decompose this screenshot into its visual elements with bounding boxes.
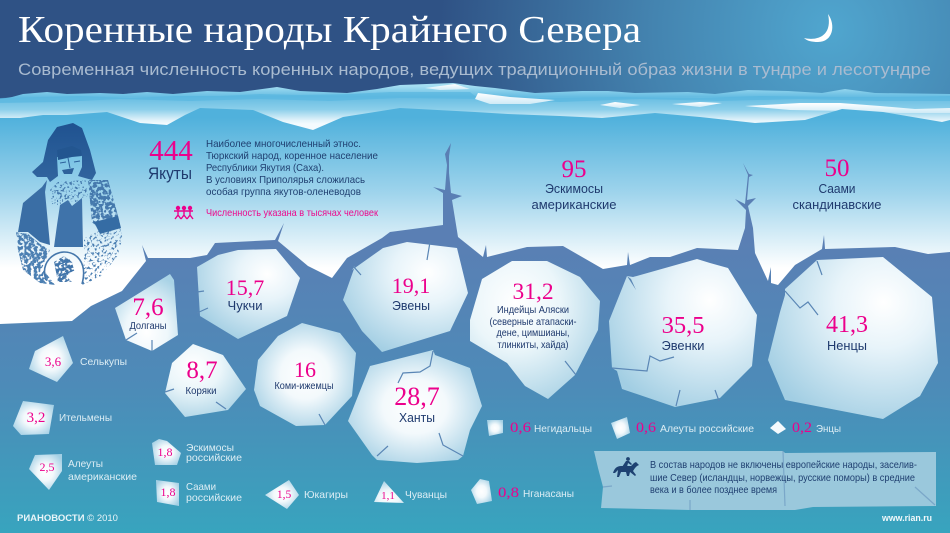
credit: RIA Novosti: РИАНОВОСТИ © 2010	[17, 513, 118, 524]
floe: Alaska Indians: дене, цимшианы,	[496, 327, 570, 339]
floe: Koryaks: Коряки	[186, 385, 217, 397]
ice horizon band	[0, 83, 950, 130]
floe: Evenks: 35,5	[662, 312, 704, 339]
Yakuts description: В условиях Приполярья сложилась	[206, 174, 365, 186]
floe: American Aleuts: 2,5	[40, 460, 54, 474]
floe: Chuvans	[374, 481, 447, 503]
floe: Enets	[770, 420, 841, 436]
floe: Evenks: Эвенки	[662, 338, 704, 353]
floe: Chukchi: 15,7	[226, 275, 264, 300]
floe: Alaska Indians: 31,2	[512, 279, 554, 305]
floe: Nenets: Ненцы	[827, 338, 867, 353]
Yakuts value and name: 444	[149, 135, 193, 167]
floe: Selkups	[29, 336, 127, 382]
floe: Russian Eskimos: Эскимосы	[186, 442, 234, 454]
floe: Komi-Izhemtsy: 16	[294, 357, 316, 382]
Scandinavian Saami: Саами	[818, 182, 856, 196]
sea ice with gradient	[0, 108, 950, 533]
illustration: Yakut man in a fur hood	[16, 123, 123, 285]
floe: Khanty: Ханты	[399, 410, 435, 425]
floe: Russian Eskimos: российские	[186, 452, 242, 464]
floe: Russian Saami: 1,8	[160, 485, 176, 499]
floe: Chuvans: 1,1	[381, 490, 395, 502]
floe: Itelmens: Ительмены	[59, 412, 112, 424]
floe: Itelmens: 3,2	[27, 410, 45, 426]
floe: Enets: 0,2	[792, 420, 812, 436]
floe: Chukchi: Чукчи	[228, 298, 262, 313]
floe: Evenks	[609, 259, 757, 407]
floe: Dolgans: Долганы	[130, 321, 166, 332]
floe: Nenets	[768, 257, 938, 419]
floe: Evens: Эвены	[392, 298, 430, 313]
floe: Negidals: 0,6	[510, 420, 532, 436]
floe: American Aleuts: американские	[68, 471, 137, 483]
floe: Alaska Indians: тлинкиты, хайда)	[498, 339, 568, 351]
floe: Russian Saami: российские	[186, 492, 242, 504]
American Eskimos: американские	[532, 198, 617, 212]
floe: Alaska Indians	[470, 261, 600, 399]
floe: Koryaks: 8,7	[186, 357, 218, 384]
floe: Nenets: 41,3	[826, 312, 868, 338]
floe: Chukchi	[197, 249, 300, 339]
American Eskimos: 95	[562, 156, 586, 183]
floe: Selkups: Селькупы	[80, 356, 127, 368]
floe: Russian Saami	[156, 480, 242, 506]
floe: Russian Saami: Саами	[186, 481, 216, 493]
floe: Negidals	[487, 420, 592, 436]
floe: Russian Eskimos	[152, 439, 242, 465]
floe: Evens: 19,1	[392, 273, 430, 298]
floe: Nganasans: 0,8	[498, 485, 519, 501]
callout: exclusions note: века и в более позднее время	[650, 484, 777, 496]
Scandinavian Saami: 50	[824, 155, 850, 182]
floe: Nganasans: Нганасаны	[523, 488, 574, 500]
floe: Negidals: Негидальцы	[534, 423, 592, 435]
Yakuts description: Тюркский народ, коренное население	[206, 150, 378, 162]
background: night sky	[0, 0, 950, 130]
floe: Alaska Indians: (северные атапаски-	[490, 316, 577, 328]
floe: Dolgans: 7,6	[132, 294, 164, 321]
floe: Russian Aleuts	[611, 417, 754, 439]
floe: Yukaghirs: Юкагиры	[304, 489, 348, 501]
title: Коренные народы Крайнего Севера	[18, 9, 641, 51]
floe: Itelmens	[13, 401, 112, 435]
Yakuts description: Наиболее многочисленный этнос.	[206, 138, 361, 150]
Yakuts value and name: Якуты	[148, 164, 192, 183]
American Eskimos	[532, 156, 617, 212]
American Eskimos: Эскимосы	[545, 182, 603, 196]
floe: Khanty: 28,7	[394, 382, 440, 411]
icon: horse and rider	[613, 457, 639, 477]
Yakuts value and name	[148, 135, 193, 183]
floe: Evens	[343, 242, 468, 352]
callout: exclusions note	[594, 451, 936, 510]
floe: Enets: Энцы	[816, 423, 841, 435]
floe: Yukaghirs: 1,5	[277, 489, 291, 501]
icon: people	[174, 206, 193, 219]
floe: Russian Aleuts: Алеуты российские	[660, 423, 754, 435]
floe: Nganasans	[471, 479, 574, 504]
Scandinavian Saami	[792, 155, 882, 212]
floe: Komi-Izhemtsy: Коми-ижемцы	[274, 380, 334, 392]
moon	[804, 14, 832, 42]
Scandinavian Saami: скандинавские	[792, 198, 882, 212]
callout: exclusions note: В состав народов не включены европейские народы, заселив-	[650, 459, 917, 471]
floe: Selkups: 3,6	[45, 354, 62, 369]
floe: Dolgans	[115, 274, 178, 351]
open water with cracks	[0, 143, 950, 533]
Yakuts description: Республики Якутия (Саха).	[206, 162, 324, 174]
floe: Russian Aleuts: 0,6	[636, 420, 657, 436]
floe: Chuvans: Чуванцы	[405, 489, 447, 501]
Yakuts description: особая группа якутов-оленеводов	[206, 186, 361, 198]
floe: Koryaks	[165, 344, 246, 417]
floe: American Aleuts: Алеуты	[68, 458, 103, 470]
credit: website: www.rian.ru	[881, 513, 932, 524]
floe: American Aleuts	[29, 454, 137, 490]
unit note: Численность указана в тысячах человек	[206, 207, 378, 219]
callout: exclusions note: шие Север (исландцы, норвежцы, русские поморы) в средние	[650, 472, 915, 484]
floe: Alaska Indians: Индейцы Аляски	[497, 304, 569, 316]
subtitle: Современная численность коренных народов, ведущих традиционный образ жизни в тундре и лесотундре	[18, 60, 931, 79]
floe: Khanty	[348, 350, 482, 463]
floe: Yukaghirs	[265, 480, 348, 509]
Yakuts description	[206, 138, 378, 198]
floe: Komi-Izhemtsy	[254, 323, 356, 426]
floe: Russian Eskimos: 1,8	[158, 445, 172, 459]
